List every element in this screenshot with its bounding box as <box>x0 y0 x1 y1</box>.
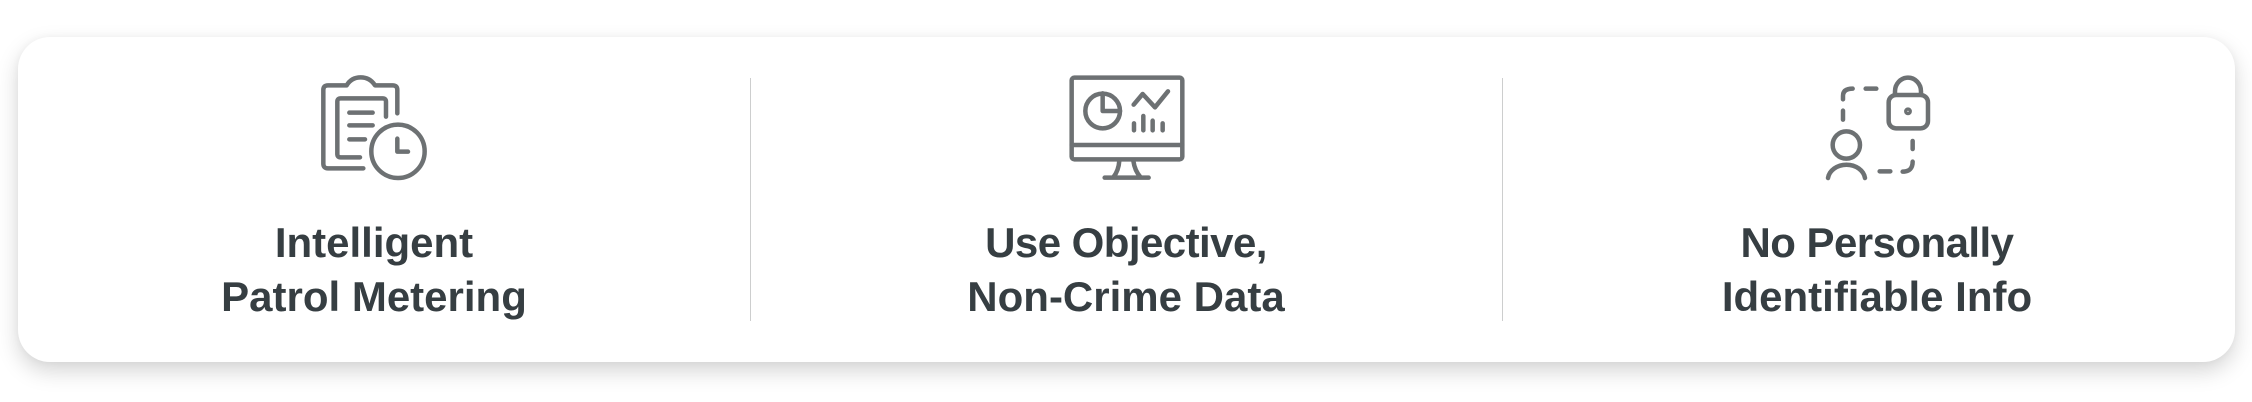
heading: Use Objective, Non-Crime Data: Use Objective, <box>985 219 1267 266</box>
heading: Intelligent Patrol Metering: Patrol Metering <box>221 273 527 320</box>
heading: Intelligent Patrol Metering <box>221 219 527 320</box>
heading: No Personally Identifiable Info: No Personally <box>1741 219 2013 266</box>
heading: Use Objective, Non-Crime Data <box>967 219 1285 320</box>
heading: Intelligent Patrol Metering: Intelligent <box>275 219 473 266</box>
heading: No Personally Identifiable Info <box>1722 219 2032 320</box>
heading: Use Objective, Non-Crime Data: Non-Crime Data <box>967 273 1285 320</box>
heading: No Personally Identifiable Info: Identifiable Info <box>1722 273 2032 320</box>
panel: feature card <box>18 37 2235 362</box>
